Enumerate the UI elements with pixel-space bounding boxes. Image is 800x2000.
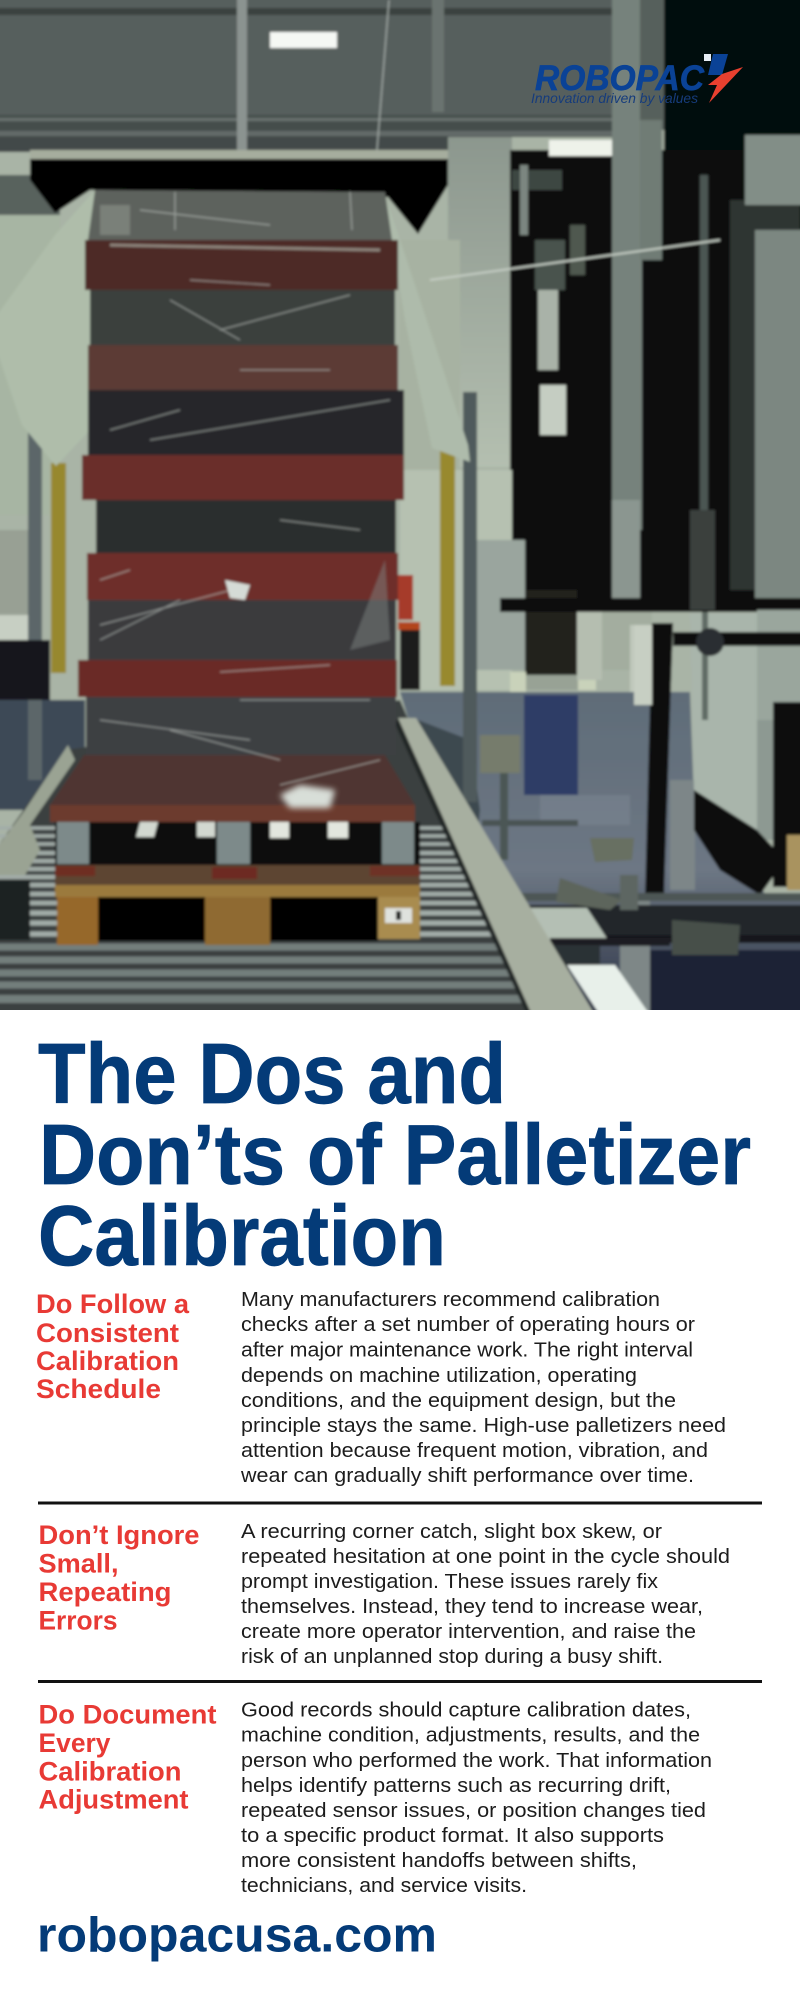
pallet [55, 822, 420, 867]
section 1 body: Many manufacturers recommend calibration [241, 1288, 660, 1311]
title: Calibration [38, 1189, 446, 1284]
section 1 body: conditions, and the equipment design, but the [241, 1389, 676, 1412]
section 3 heading: Do Document [38, 1700, 217, 1730]
title: The Dos and [38, 1027, 506, 1122]
floor [400, 692, 800, 1015]
section 2 heading: Errors [38, 1606, 118, 1636]
device cluster lower right [520, 893, 800, 901]
section 1 body: attention because frequent motion, vibration, and [241, 1439, 708, 1462]
section 2 heading: Repeating [38, 1577, 172, 1607]
section 1 body: depends on machine utilization, operating [241, 1364, 637, 1387]
section 1 body: after major maintenance work. The right interval [241, 1338, 693, 1362]
section 2 body: create more operator intervention, and raise the [241, 1620, 696, 1643]
photo: wrapped pallet on conveyor [0, 0, 800, 1015]
section 2 heading [38, 1520, 200, 1636]
section 2 body: themselves. Instead, they tend to increase wear, [241, 1595, 703, 1618]
logo: Robopac [531, 54, 743, 106]
section 3 heading: Adjustment [38, 1784, 189, 1814]
section 3 heading: Every [38, 1728, 111, 1758]
black top plate [30, 158, 448, 234]
rails [398, 718, 595, 1015]
section 2 body: risk of an unplanned stop during a busy shift. [241, 1645, 663, 1668]
section 1 heading: Do Follow a [36, 1289, 189, 1319]
logo: Robopac: ROBOPAC [535, 59, 705, 98]
section 2 body [241, 1520, 730, 1668]
film flaps [26, 196, 94, 468]
section 2 heading: Small, [38, 1548, 118, 1578]
section 2 body: repeated hesitation at one point in the cycle should [241, 1545, 730, 1568]
lower back wall [400, 470, 512, 690]
wall panel and post [692, 780, 754, 832]
section 1 body: checks after a set number of operating hours or [241, 1313, 695, 1336]
conveyor rollers [0, 700, 535, 1015]
section 1 body: principle stays the same. High-use palletizers need [241, 1414, 726, 1437]
title: Don’ts of Palletizer [39, 1108, 751, 1203]
section 1 body: wear can gradually shift performance over time. [240, 1464, 694, 1487]
load layers [88, 190, 392, 240]
section 3 body: to a specific product format. It also supports [241, 1824, 664, 1847]
section 3 body: Good records should capture calibration dates, [241, 1698, 691, 1722]
section 3 body [241, 1698, 712, 1897]
section 3 body: repeated sensor issues, or position changes tied [241, 1799, 706, 1822]
section 1 heading: Schedule [36, 1374, 161, 1404]
section 3 body: helps identify patterns such as recurring drift, [241, 1774, 671, 1797]
section 1 heading: Calibration [36, 1346, 179, 1376]
section 3 body: machine condition, adjustments, results, and the [241, 1724, 700, 1746]
section 3 body: more consistent handoffs between shifts, [241, 1849, 637, 1872]
film highlights [100, 192, 390, 785]
section 3 heading [38, 1700, 217, 1814]
section 3 body: technicians, and service visits. [241, 1874, 527, 1897]
section 2 body: A recurring corner catch, slight box skew, or [241, 1520, 662, 1543]
logo: Robopac: Innovation driven by values [531, 90, 698, 106]
section 3 body: person who performed the work. That information [241, 1749, 712, 1772]
posts [51, 463, 66, 673]
footer url: robopacusa.com [37, 1908, 437, 1962]
title [38, 1027, 751, 1284]
section 2 body: prompt investigation. These issues rarely fix [241, 1570, 659, 1593]
section 1 heading [36, 1289, 189, 1404]
section 2 heading: Don’t Ignore [38, 1520, 200, 1550]
section 1 heading: Consistent [36, 1318, 179, 1348]
section 1 body [240, 1288, 726, 1487]
section 3 heading: Calibration [38, 1756, 182, 1786]
